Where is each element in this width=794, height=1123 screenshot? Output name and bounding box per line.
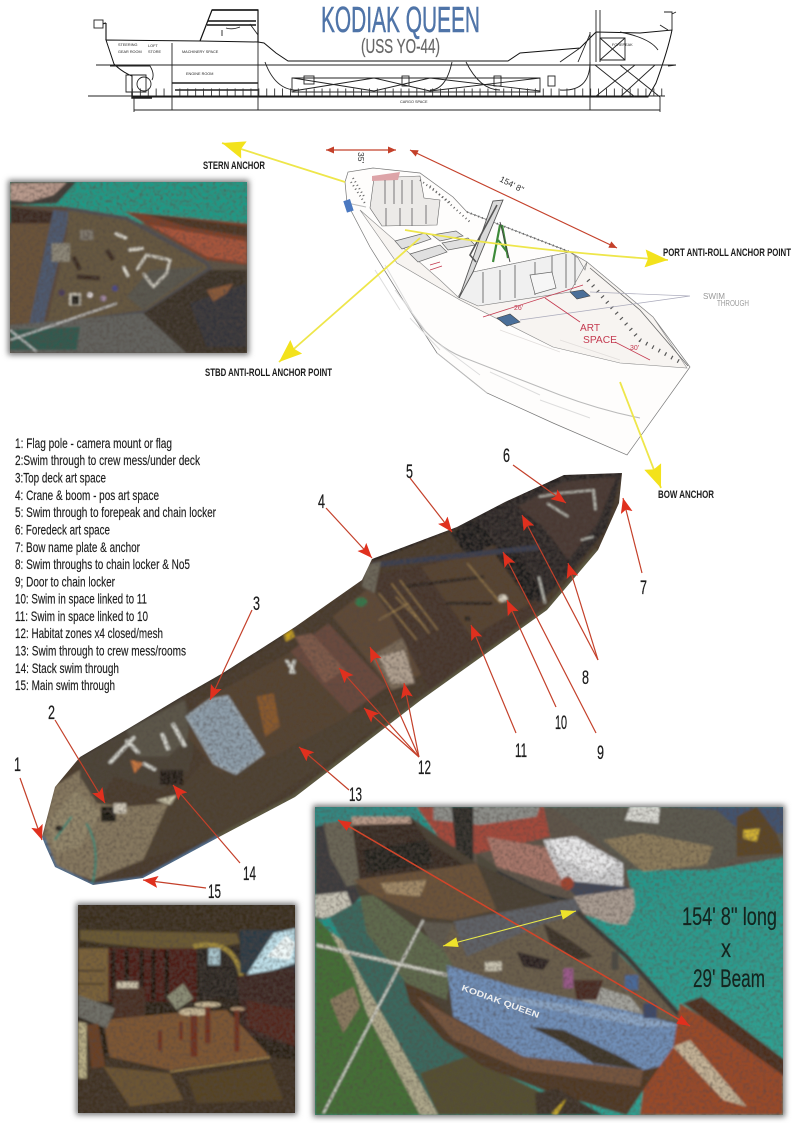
list: numbered feature key: 4: Crane & boom - pos art space (15, 487, 159, 503)
callout 5: 5 (406, 462, 413, 483)
list: numbered feature key: 14: Stack swim through (15, 660, 119, 676)
blueprint compartment labels: ENGINE ROOM (186, 72, 213, 76)
callout 13 (299, 747, 362, 806)
list: numbered feature key: 10: Swim in space linked to 11 (15, 590, 147, 606)
blueprint compartment labels: FOREPEAK (612, 43, 633, 47)
callout 7: 7 (640, 578, 647, 599)
blueprint compartment labels: MACHINERY SPACE (182, 50, 219, 54)
callout 5 (406, 462, 452, 532)
hull name on ship: KODIAK QUEEN (460, 982, 541, 1020)
photo annotation: length arrow (338, 820, 690, 1026)
photo: ship alongside dock (310, 800, 794, 1123)
photo annotation: beam arrow (443, 911, 576, 946)
blueprint compartment labels (118, 43, 633, 104)
photo caption: dimensions (682, 903, 777, 993)
callout 7 (623, 498, 647, 599)
yellow arrow: stern anchor (203, 143, 345, 182)
photo: foredeck from above (0, 170, 260, 360)
subtitle: (USS YO-44) (361, 36, 440, 58)
yellow arrow: stern anchor: STERN ANCHOR (203, 160, 265, 172)
callout 11: 11 (515, 741, 527, 762)
callout 6 (503, 446, 566, 503)
yellow arrow: bow anchor (620, 382, 714, 501)
list: numbered feature key: 13: Swim through to crew mess/rooms (15, 642, 186, 658)
callout 1: 1 (14, 755, 21, 776)
blueprint compartment labels: STEERING (118, 43, 137, 47)
callout 9 (503, 552, 604, 764)
callout 3 (210, 594, 260, 700)
sketch: ship perspective drawing (343, 168, 749, 455)
photo caption: dimensions: x (721, 935, 731, 963)
list: numbered feature key: 2:Swim through to crew mess/under deck (15, 452, 201, 468)
photo: crew mess interior (70, 900, 310, 1123)
blueprint compartment labels: GEAR ROOM (118, 50, 142, 54)
list: numbered feature key: 6: Foredeck art space (15, 522, 110, 538)
callout 10: 10 (555, 713, 567, 734)
yellow arrow: port anti-roll (405, 230, 791, 260)
sketch: art space note: 30' (630, 345, 639, 352)
sketch: art space note: 26' (514, 305, 523, 312)
callout 1 (14, 755, 42, 840)
photo: overhead ship model (42, 473, 622, 885)
callout 4: 4 (318, 492, 325, 513)
callout 8 (522, 515, 598, 689)
list: numbered feature key: 1: Flag pole - camera mount or flag (15, 435, 172, 451)
callout 12: 12 (418, 758, 431, 779)
blueprint compartment labels: LOFT (148, 44, 158, 48)
list: numbered feature key: 3:Top deck art space (15, 470, 106, 486)
callout 10 (507, 600, 567, 734)
list: numbered feature key: 7: Bow name plate & anchor (15, 539, 140, 555)
callout 14 (173, 785, 256, 885)
dimension arrow: length (410, 150, 617, 248)
callout 4 (318, 492, 372, 558)
callout 12 (339, 647, 431, 779)
yellow arrow: starboard anti-roll: STBD ANTI-ROLL ANCHOR POINT (205, 367, 332, 379)
list: numbered feature key: 8: Swim throughs to chain locker & No5 (15, 556, 190, 572)
callout 2: 2 (48, 703, 55, 724)
title: KODIAK QUEEN (321, 0, 480, 40)
callout 2 (48, 703, 105, 803)
dimension arrow: length: 154' 8" (498, 174, 526, 195)
sketch: swim through note: THROUGH (717, 299, 749, 308)
list: numbered feature key (15, 435, 216, 693)
list: numbered feature key: 5: Swim through to forepeak and chain locker (15, 504, 216, 520)
callout 14: 14 (243, 864, 256, 885)
callout 9: 9 (597, 743, 604, 764)
dimension arrow: beam: 35' (356, 152, 366, 163)
sketch: swim through note: SWIM (703, 292, 725, 301)
sketch: swim through note (703, 292, 749, 308)
list: numbered feature key: 9; Door to chain locker (15, 574, 115, 590)
sketch: art space note: ART (580, 323, 600, 334)
blueprint compartment labels: STORE (148, 50, 161, 54)
list: numbered feature key: 11: Swim in space linked to 10 (15, 608, 148, 624)
sketch: art space note: SPACE (583, 335, 617, 346)
list: numbered feature key: 12: Habitat zones x4 closed/mesh (15, 625, 163, 641)
sketch: art space note (514, 305, 639, 352)
callout 3: 3 (253, 594, 260, 615)
callout 6: 6 (503, 446, 510, 467)
dimension arrow: beam (326, 150, 396, 163)
blueprint compartment labels: CARGO SPACE (400, 100, 428, 104)
callout 15: 15 (208, 882, 221, 903)
callout 11 (471, 625, 527, 762)
callout 13: 13 (349, 785, 362, 806)
yellow arrow: starboard anti-roll (205, 238, 420, 379)
list: numbered feature key: 15: Main swim through (15, 677, 115, 693)
blueprint: ship side elevation (88, 10, 676, 112)
yellow arrow: bow anchor: BOW ANCHOR (658, 489, 714, 501)
callout 8: 8 (582, 668, 589, 689)
callout 15 (143, 880, 221, 903)
